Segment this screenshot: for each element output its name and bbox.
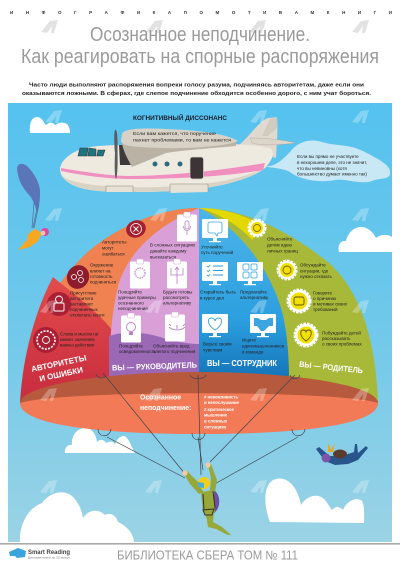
text: employee notes: Старайтесь быть [200, 288, 237, 294]
icon: discussion [278, 261, 296, 279]
canopy orange sector [20, 208, 199, 403]
text: employee notes: Ищите [242, 338, 256, 342]
goggles [198, 482, 204, 488]
text: manager notes: рассмотреть [163, 295, 190, 300]
wing underside [122, 141, 236, 167]
airplane [60, 117, 296, 193]
text: parent notes: Говорите [313, 290, 333, 296]
skydiver body [316, 444, 368, 465]
text: manager notes: Будьте готовы [163, 290, 192, 294]
backpack [333, 450, 347, 458]
text: parent notes: ситуации, где [300, 268, 329, 274]
canopy yellow sliver [199, 208, 264, 240]
clipboard: closed eye [165, 312, 185, 342]
text: parent notes: и мотивах своих [313, 302, 348, 306]
small parachute canopy [17, 164, 40, 212]
cloud: bottom right [265, 479, 364, 523]
hair [328, 443, 335, 452]
text: authorities and errors notes: Окружение [90, 262, 114, 268]
wing text: пахнет проблемами, то вам не кажется [133, 138, 231, 144]
wing text: Если вам кажется, что поручение [133, 131, 216, 137]
text: manager notes: неподчинения [118, 306, 148, 311]
label: you are the employee: ВЫ — СОТРУДНИК [207, 359, 277, 368]
text: employee notes: в курсе дел [200, 296, 224, 300]
cloud: middle left [65, 428, 135, 453]
text: authorities and errors notes: авторитета [70, 296, 94, 301]
parachute lines [96, 373, 305, 485]
glove right [205, 462, 211, 468]
text: manager notes: удачные примеры [118, 295, 156, 300]
text: manager notes: Поощряйте [119, 342, 143, 348]
text: employee notes: альтернативу [240, 295, 269, 300]
monitor: question [202, 219, 228, 242]
text: parent notes: рассказывать [322, 336, 351, 341]
text: authorities and errors notes: отключать мозги [70, 312, 105, 318]
text: manager notes: альтернативу [163, 300, 192, 306]
text: authorities and errors notes: готовность [90, 274, 113, 279]
text: parent notes: требований [313, 306, 338, 312]
pink stripe [61, 163, 265, 179]
cockpit windows [78, 148, 105, 156]
cloud: upper left [30, 117, 70, 133]
label: authorities and errors: АВТОРИТЕТЫ [30, 353, 87, 374]
text: parent notes: нужно отказать [300, 274, 333, 279]
text: authorities and errors notes: влияет на [90, 268, 111, 274]
fuselage shadow [62, 167, 266, 192]
text: authorities and errors notes: Присутствие [70, 290, 97, 296]
monitor: checklist [202, 262, 228, 285]
small skydiver figure [18, 229, 42, 250]
text: manager notes: высказаться [150, 254, 177, 260]
text: disobedience list: мышление [204, 412, 228, 418]
text: manager notes: давайте каждому [150, 248, 187, 254]
engine [119, 145, 131, 165]
text: parent notes: Побуждайте детей [322, 330, 361, 336]
text: authorities and errors notes: подчиняться [90, 280, 117, 284]
small parachutist [17, 164, 49, 250]
footer title: БИБЛИОТЕКА СБЕРА ТОМ № 111 [117, 548, 298, 562]
text: conscious disobedience: неподчинение: [140, 405, 191, 412]
icon: mistake [124, 218, 148, 240]
canopy base: green parent sector [20, 208, 378, 403]
head [322, 454, 330, 462]
intro text: Часто люди выполняют распоряжения вопреки голосу разума, подчиняясь авторитетам, даже если они [29, 82, 364, 88]
icon: gear [33, 327, 59, 353]
text: disobedience list: ≠ невежливость [204, 394, 239, 400]
text: authorities and errors notes: заставляет [70, 302, 93, 306]
clipboard: light bulb [121, 313, 141, 342]
canopy red sector [20, 277, 112, 403]
tail fin [238, 117, 277, 158]
text: employee notes: в команде [242, 350, 264, 354]
top strapline: И Н Ф О Г Р А Ф И К А П О М О Т И В А М К Н И Г И [10, 10, 392, 15]
watermark logos on header [41, 20, 369, 33]
icon: personal boundaries [249, 220, 265, 236]
text: manager notes: осознанного [118, 300, 144, 306]
label: authorities and errors: И ОШИБКИ [39, 365, 84, 383]
text: employee notes: чувствам [203, 348, 222, 352]
landing gear covers [106, 184, 208, 193]
fuselage [60, 144, 273, 192]
door [190, 157, 204, 179]
cloud: bottom left [20, 492, 134, 542]
cloud: upper right [338, 227, 392, 252]
icon: speech bubbles [288, 290, 310, 312]
text: parent notes: личных границ [267, 248, 298, 254]
parachute canopy [20, 208, 378, 434]
helmet [198, 477, 210, 489]
text: authorities and errors notes: ошибаться [102, 252, 125, 256]
cabin portholes [152, 162, 182, 166]
main skydiver [182, 462, 231, 535]
text: authorities and errors notes: могут [102, 246, 114, 250]
text: authorities and errors notes: Авторитеты [102, 240, 126, 244]
text: employee notes: единомышленников [242, 344, 285, 348]
text: employee notes: суть поручений [201, 249, 234, 255]
monitor: heart [202, 314, 228, 337]
text: disobedience list: в сложных [204, 418, 228, 424]
harness [203, 491, 215, 515]
icon: surroundings [63, 261, 93, 293]
text: manager notes: слепого подчинения [153, 349, 196, 354]
text: authorities and errors notes: подчиненных [70, 307, 99, 312]
text: disobedience list: и непослушание [204, 400, 240, 405]
propeller [114, 130, 118, 179]
text: employee notes: Верьте своим [203, 342, 231, 346]
text: employee notes: Предлагайте [240, 288, 267, 294]
sky panel [8, 103, 392, 542]
text: parent notes: Объясняйте [267, 236, 293, 242]
text: manager notes: Поощряйте [118, 288, 142, 294]
text: disobedience list: ≠ критическое [204, 407, 235, 412]
left arm [184, 471, 203, 494]
clipboard: arrows [167, 259, 187, 288]
exhaust note text: в нехорошем деле, это не значит, [297, 160, 367, 165]
text: parent notes: о своих проблемах [322, 342, 362, 346]
intro text: оказываются ложными. В сферах, где слепое подчинение обходится особенно дорого, с ним учат бороться. [22, 90, 371, 97]
logo wordmark: Smart Reading [28, 550, 70, 556]
heading: cognitive dissonance: КОГНИТИВНЫЙ ДИССОНАНС [133, 113, 227, 122]
right arm [208, 464, 217, 492]
label: you are the parent: ВЫ — РОДИТЕЛЬ [299, 360, 364, 375]
tailplane [250, 138, 296, 145]
clipboard: award [130, 259, 150, 288]
icon: authority presence [47, 292, 71, 316]
text: parent notes: о причинах [313, 296, 337, 301]
text: authorities and errors notes: Слова и мысли не [60, 332, 99, 336]
exhaust note text: большинство думает именно так) [297, 172, 367, 176]
legs [204, 511, 231, 535]
logo tagline: Деловая книга за 15 минут [28, 556, 71, 560]
icons: parent sector [249, 220, 317, 346]
footer rule [0, 543, 400, 545]
monitor: options grid [237, 262, 263, 285]
canopy pink sector [109, 208, 199, 380]
exhaust note text: Если вы прямо не участвуете [297, 154, 359, 159]
text: parent notes: Обсуждайте [300, 262, 326, 268]
monitors: employee sector [202, 219, 276, 337]
canopy purple band [109, 333, 199, 380]
label: you are the manager: ВЫ — РУКОВОДИТЕЛЬ [112, 361, 197, 372]
text: employee notes: Уточняйте [201, 244, 223, 250]
canopy inner brown band [20, 372, 378, 434]
text: authorities and errors notes: важны действия [60, 342, 95, 348]
parachute lines [32, 203, 39, 228]
small skydiver right [316, 443, 368, 465]
logo mark [9, 548, 26, 558]
text: manager notes: Объясняйте вред [153, 342, 190, 348]
clipboard: microphone [177, 212, 197, 242]
footer logo [9, 548, 71, 560]
icon: heart in bubble [295, 324, 317, 346]
text: authorities and errors notes: имеют значения, [60, 337, 95, 342]
text: conscious disobedience: Осознанное [140, 394, 181, 402]
title: Осознанное неподчинение. [90, 24, 310, 46]
text: disobedience list: ситуациях [204, 424, 227, 430]
text: parent notes: детям идею [267, 242, 292, 248]
watermark logos on sky [40, 110, 369, 493]
exhaust note text: что вы невиновны (хотя [297, 166, 347, 171]
wing top with text background [121, 129, 238, 148]
clipboards: manager sector [121, 212, 197, 342]
text: manager notes: В сложных ситуациях [150, 242, 196, 248]
icon group: authorities [33, 218, 148, 353]
text: manager notes: осведомленность [119, 349, 157, 354]
gloves [182, 470, 188, 476]
canopy salmon underside [20, 393, 378, 434]
torso [201, 490, 215, 512]
cognitive dissonance exhaust cloud [262, 140, 390, 182]
canopy blue sector [199, 208, 289, 380]
backpack [214, 490, 219, 513]
monitor: handshake [250, 314, 276, 337]
